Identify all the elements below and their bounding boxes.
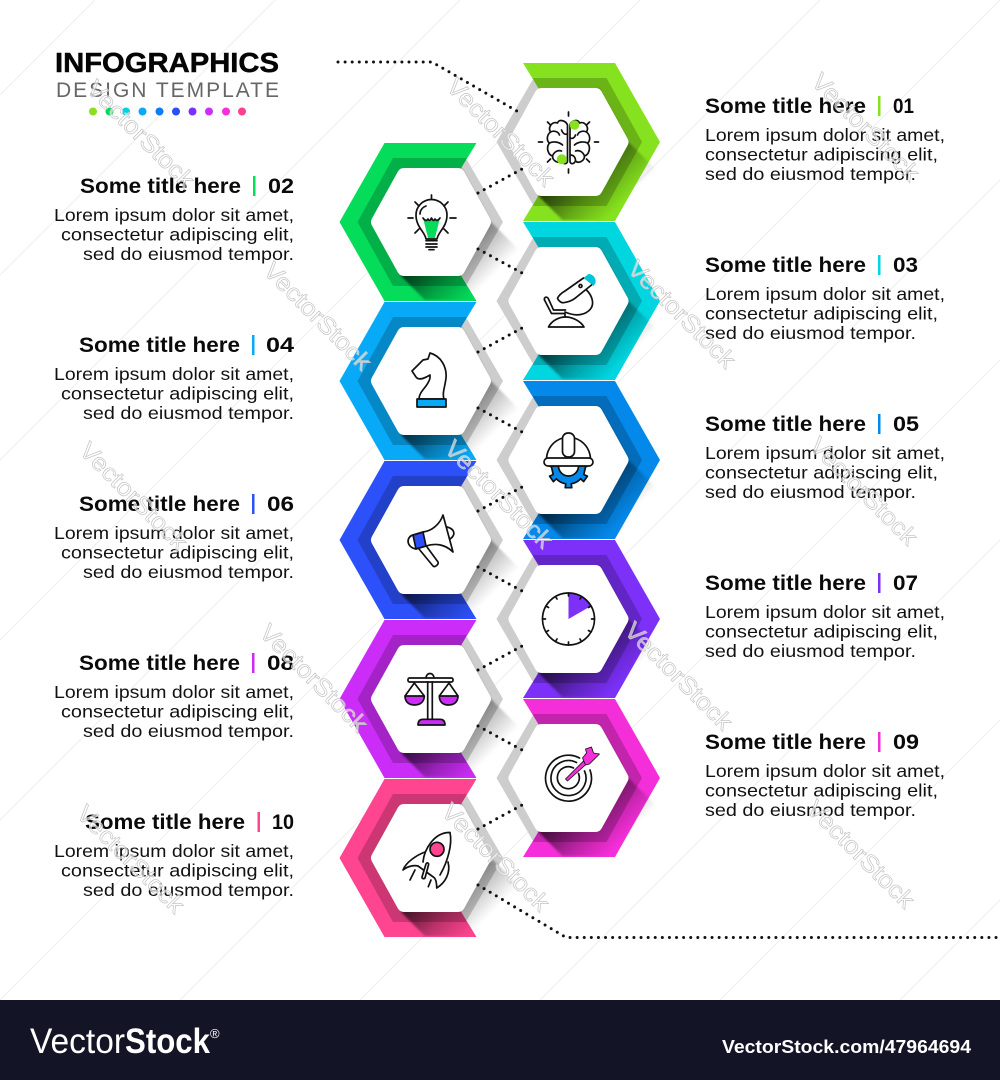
text block 09 (705, 731, 945, 820)
icon: balance scales (405, 674, 458, 725)
footer bar: Vector (30, 1022, 125, 1061)
text block 09: 09 (893, 731, 919, 754)
hexagon 07 (496, 540, 664, 698)
watermarks: VectorStock (806, 68, 925, 188)
footer bar: VectorStock.com/47964694 (722, 1036, 972, 1057)
text block 07: consectetur adipiscing elit, (705, 622, 938, 642)
text block 02: Some title here (80, 175, 241, 198)
text block 09: sed do eiusmod tempor. (705, 800, 916, 820)
hexagon 03 (496, 222, 664, 380)
watermarks: VectorStock (81, 75, 200, 195)
hexagon 05 (496, 381, 664, 539)
text block 03: 03 (893, 254, 918, 277)
text block 02: Lorem ipsum dolor sit amet, (54, 205, 294, 225)
text block 07: Lorem ipsum dolor sit amet, (705, 602, 945, 622)
hexagon 01 (496, 63, 664, 221)
watermarks: VectorStock (619, 617, 738, 737)
text block 04: consectetur adipiscing elit, (61, 384, 294, 404)
watermarks: VectorStock (801, 795, 920, 915)
text block 10: Some title here (85, 811, 245, 834)
watermarks: VectorStock (71, 800, 190, 920)
text block 02 (54, 175, 294, 264)
watermarks: VectorStock (441, 73, 560, 193)
title (55, 47, 279, 102)
text block 04: Some title here (79, 334, 240, 357)
text block 05: Some title here (705, 413, 866, 436)
text block 06: sed do eiusmod tempor. (83, 562, 294, 582)
text block 03: sed do eiusmod tempor. (705, 323, 916, 343)
text block 04: 04 (266, 334, 294, 357)
text block 08 (54, 652, 294, 741)
text block 04 (54, 334, 294, 423)
dotted connector lines (338, 62, 1000, 938)
text block 10: 10 (272, 811, 294, 834)
hexagon 04 (340, 302, 527, 460)
footer bar: ® (210, 1026, 220, 1041)
text block 01: Some title here (705, 95, 866, 118)
watermarks: VectorStock (436, 798, 555, 918)
hexagon 02 (340, 143, 527, 301)
text block 03: Some title here (705, 254, 866, 277)
text block 08: Some title here (79, 652, 240, 675)
text block 03 (705, 254, 945, 343)
text block 08: consectetur adipiscing elit, (61, 702, 294, 722)
text block 02: 02 (268, 175, 294, 198)
watermarks: VectorStock (804, 432, 923, 552)
colour dots row (89, 108, 246, 116)
icon: target with arrow (546, 747, 600, 801)
text block 06 (54, 493, 294, 582)
text block 02: consectetur adipiscing elit, (61, 224, 294, 244)
text block 09: Some title here (705, 731, 866, 754)
text block 01: consectetur adipiscing elit, (705, 144, 938, 164)
text block 10: sed do eiusmod tempor. (83, 880, 294, 900)
title: INFOGRAPHICS (55, 47, 279, 78)
text block 08: Lorem ipsum dolor sit amet, (54, 682, 294, 702)
text block 01: 01 (893, 95, 914, 118)
text block 09: Lorem ipsum dolor sit amet, (705, 761, 945, 781)
icon: megaphone (408, 515, 454, 567)
text block 06: Lorem ipsum dolor sit amet, (54, 523, 294, 543)
icon: light bulb (408, 195, 456, 250)
text block 05: sed do eiusmod tempor. (705, 482, 916, 502)
footer bar (0, 1000, 1000, 1080)
text block 05: Lorem ipsum dolor sit amet, (705, 443, 945, 463)
text block 03: Lorem ipsum dolor sit amet, (705, 284, 945, 304)
watermarks: VectorStock (439, 435, 558, 555)
text block 08: sed do eiusmod tempor. (83, 721, 294, 741)
text block 01 (705, 95, 945, 184)
text block 02: sed do eiusmod tempor. (83, 244, 294, 264)
icon: clock (542, 593, 594, 645)
text block 06: consectetur adipiscing elit, (61, 542, 294, 562)
title: DESIGN TEMPLATE (56, 79, 279, 102)
text block 07: 07 (893, 572, 918, 595)
hexagon 10 (340, 779, 527, 937)
text block 03: consectetur adipiscing elit, (705, 304, 938, 324)
icon: chess knight (412, 353, 446, 407)
text block 10: Lorem ipsum dolor sit amet, (54, 841, 294, 861)
watermarks: VectorStock (622, 255, 741, 375)
icon: rocket (403, 832, 451, 888)
text block 05 (705, 413, 945, 502)
text block 10: consectetur adipiscing elit, (61, 860, 294, 880)
text block 05: 05 (893, 413, 919, 436)
text block 04: sed do eiusmod tempor. (83, 403, 294, 423)
icon: microscope (544, 274, 596, 327)
text block 08: 08 (267, 652, 294, 675)
icon: helmet and gear (544, 433, 593, 488)
hexagon 08 (340, 620, 527, 778)
text block 04: Lorem ipsum dolor sit amet, (54, 364, 294, 384)
text block 09: consectetur adipiscing elit, (705, 780, 938, 800)
watermarks: VectorStock (258, 257, 377, 377)
watermarks: VectorStock (254, 619, 373, 739)
text block 06: 06 (267, 493, 294, 516)
text block 07: sed do eiusmod tempor. (705, 641, 916, 661)
watermarks (71, 68, 925, 920)
text block 05: consectetur adipiscing elit, (705, 462, 938, 482)
text block 10 (54, 811, 294, 900)
text block 01: Lorem ipsum dolor sit amet, (705, 125, 945, 145)
text block 06: Some title here (79, 493, 240, 516)
text block 01: sed do eiusmod tempor. (705, 164, 916, 184)
hexagon 06 (340, 461, 527, 619)
text block 07: Some title here (705, 572, 866, 595)
watermarks: VectorStock (74, 437, 193, 557)
icon: brain (538, 112, 598, 173)
text block 07 (705, 572, 945, 661)
footer bar: Stock (125, 1022, 210, 1061)
hexagon 09 (496, 699, 664, 857)
